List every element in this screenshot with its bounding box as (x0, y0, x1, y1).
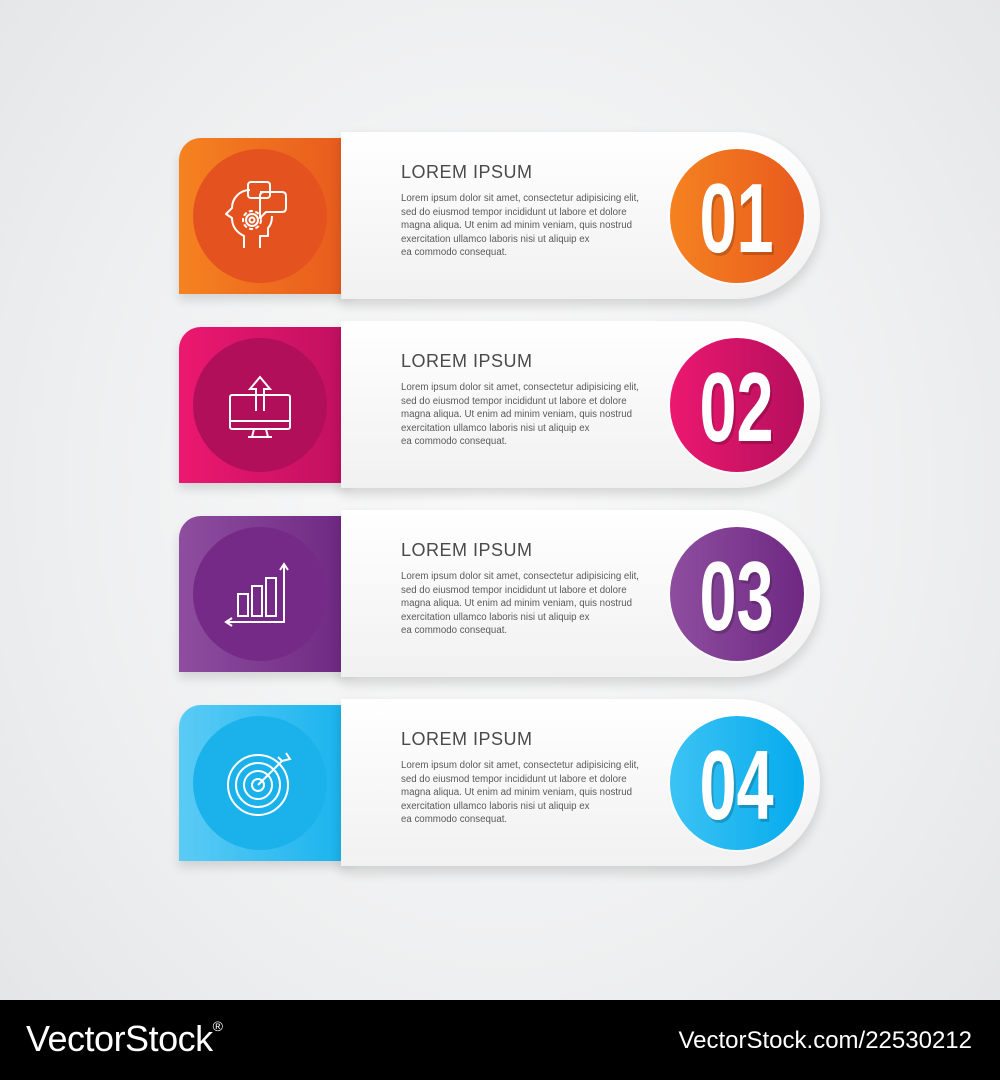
icon: bar chart (193, 527, 327, 661)
step 2 (176, 321, 824, 498)
heading 3: LOREM IPSUM (401, 540, 533, 560)
number 03: 03 (700, 540, 774, 650)
step 1 (176, 132, 824, 310)
text 1 (401, 193, 639, 258)
heading 4: LOREM IPSUM (401, 729, 533, 749)
step 3 (176, 510, 824, 688)
text 2: exercitation ullamco laboris nisi ut aliquip ex (401, 423, 589, 434)
tab 1 (179, 138, 349, 294)
number 01: 01 (700, 162, 774, 272)
tab 2 (179, 327, 349, 483)
text 3: sed do eiusmod tempor incididunt ut labore et dolore (401, 585, 627, 596)
text 1: magna aliqua. Ut enim ad minim veniam, quis nostrud (401, 220, 632, 231)
tab 4 (179, 705, 349, 861)
heading 2: LOREM IPSUM (401, 351, 533, 371)
text 3: exercitation ullamco laboris nisi ut aliquip ex (401, 612, 589, 623)
text 4: magna aliqua. Ut enim ad minim veniam, quis nostrud (401, 787, 632, 798)
text 1: Lorem ipsum dolor sit amet, consectetur adipisicing elit, (401, 193, 639, 204)
text 2: ea commodo consequat. (401, 436, 507, 447)
icon: monitor upload (193, 338, 327, 472)
text 2: magna aliqua. Ut enim ad minim veniam, quis nostrud (401, 409, 632, 420)
number 02: 02 (700, 352, 774, 462)
card 4 (341, 699, 820, 866)
text 2: Lorem ipsum dolor sit amet, consectetur adipisicing elit, (401, 382, 639, 393)
text 1: ea commodo consequat. (401, 247, 507, 258)
text 4 (401, 760, 639, 825)
step 4 (176, 699, 824, 876)
text 4: ea commodo consequat. (401, 814, 507, 825)
text 1: sed do eiusmod tempor incididunt ut labore et dolore (401, 207, 627, 218)
text 2 (401, 382, 639, 447)
text 4: Lorem ipsum dolor sit amet, consectetur adipisicing elit, (401, 760, 639, 771)
icon: target (193, 716, 327, 850)
tab 3 (179, 516, 349, 672)
card 3 (341, 510, 820, 677)
icon: head with gear (193, 149, 327, 283)
text 3 (401, 571, 639, 636)
card 2 (341, 321, 820, 488)
text 2: sed do eiusmod tempor incididunt ut labore et dolore (401, 396, 627, 407)
number 04: 04 (700, 730, 774, 840)
number 01 (670, 149, 804, 283)
text 3: magna aliqua. Ut enim ad minim veniam, quis nostrud (401, 598, 632, 609)
watermark id: VectorStock.com/22530212 (678, 1027, 972, 1054)
number 03 (670, 527, 804, 661)
number 04 (670, 716, 804, 850)
text 4: sed do eiusmod tempor incididunt ut labore et dolore (401, 774, 627, 785)
heading 1: LOREM IPSUM (401, 162, 533, 182)
number 02 (670, 338, 804, 472)
footer watermark bar (0, 1000, 1000, 1080)
text 3: Lorem ipsum dolor sit amet, consectetur adipisicing elit, (401, 571, 639, 582)
watermark logo: VectorStock® (26, 1018, 222, 1059)
text 4: exercitation ullamco laboris nisi ut aliquip ex (401, 801, 589, 812)
card 1 (341, 132, 820, 299)
text 3: ea commodo consequat. (401, 625, 507, 636)
text 1: exercitation ullamco laboris nisi ut aliquip ex (401, 234, 589, 245)
